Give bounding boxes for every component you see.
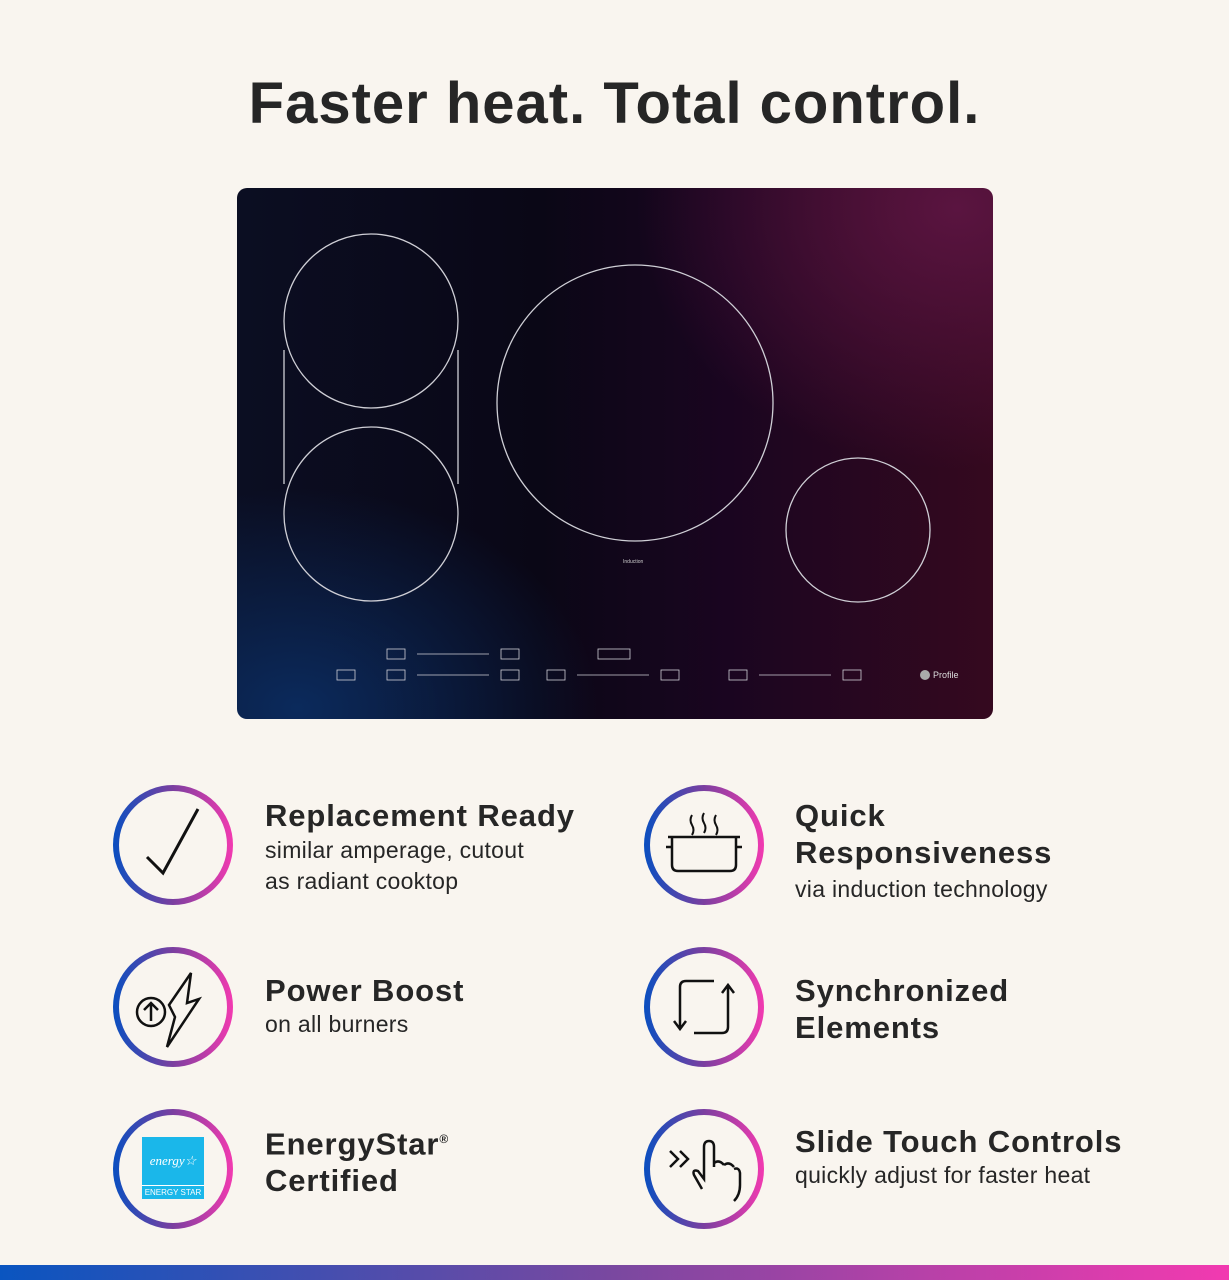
feature: Power Boost: on all burners <box>265 1011 409 1037</box>
icon: hand swipe <box>644 1109 764 1229</box>
feature: Quick Responsiveness <box>644 785 1052 905</box>
text: Slide Touch Controls <box>795 1124 1122 1159</box>
text <box>795 973 1009 1045</box>
text: Power Boost <box>265 973 464 1008</box>
icon: pot <box>644 785 764 905</box>
feature: Replacement Ready: as radiant cooktop <box>265 868 458 894</box>
icon: energy star logo: ENERGY STAR <box>145 1188 201 1197</box>
title: Faster heat. Total control. <box>249 71 980 136</box>
cooktop image: Profile <box>933 670 959 680</box>
feature: EnergyStar <box>113 1109 449 1229</box>
text: Replacement Ready <box>265 798 575 833</box>
bottom gradient bar <box>0 1265 1229 1280</box>
cooktop image: Induction <box>623 559 644 565</box>
text: EnergyStar® <box>265 1126 449 1161</box>
icon: energy star logo <box>113 1109 233 1229</box>
feature: Slide Touch Controls: quickly adjust for faster heat <box>795 1162 1090 1188</box>
cooktop image <box>237 188 993 719</box>
text <box>795 798 1052 870</box>
feature: Synchronized Elements <box>644 947 1009 1067</box>
icon: bolt <box>113 947 233 1067</box>
feature: Replacement Ready: similar amperage, cutout <box>265 837 524 863</box>
feature: Slide Touch Controls <box>644 1109 1122 1229</box>
feature: Power Boost <box>113 947 464 1067</box>
icon: sync <box>644 947 764 1067</box>
text: Elements <box>795 1010 940 1045</box>
text <box>265 1126 449 1198</box>
text: Synchronized <box>795 973 1009 1008</box>
text: Quick <box>795 798 886 833</box>
burners <box>284 234 930 602</box>
feature: Quick Responsiveness: via induction technology <box>795 876 1048 902</box>
feature: Replacement Ready <box>113 785 575 905</box>
controls <box>337 649 861 680</box>
text: Certified <box>265 1163 399 1198</box>
text: Responsiveness <box>795 835 1052 870</box>
icon: energy star logo: energy☆ <box>150 1153 196 1168</box>
icon: checkmark <box>113 785 233 905</box>
